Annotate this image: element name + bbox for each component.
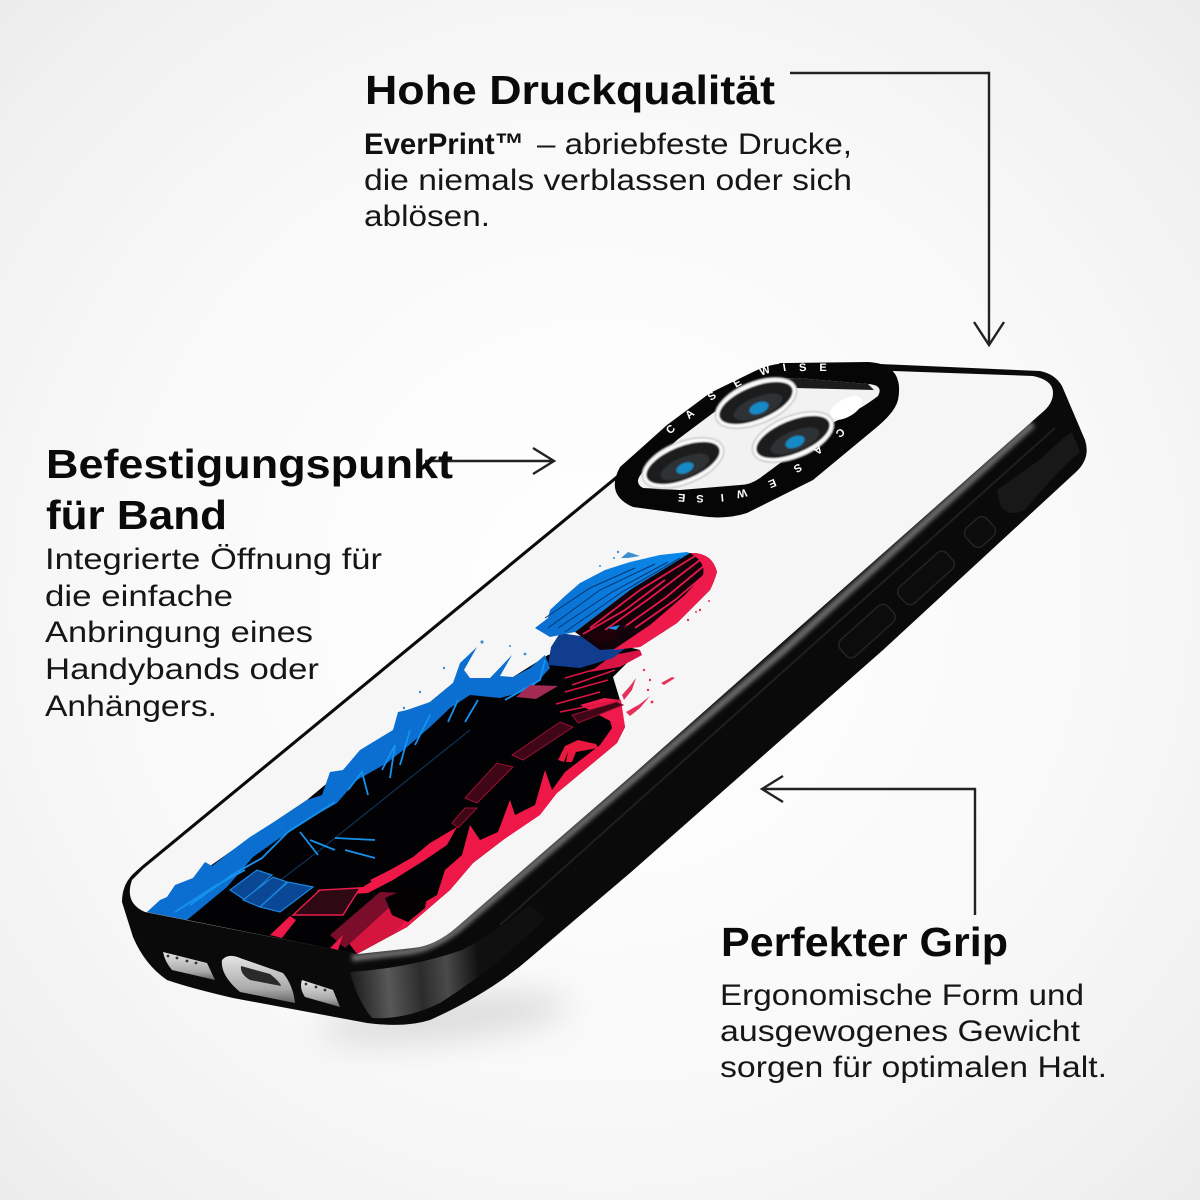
text block: print quality: EverPrint™ — [364, 128, 524, 161]
brand lettering lower: W — [735, 486, 748, 500]
collar — [590, 650, 642, 672]
figure blue feather strokes — [175, 660, 545, 912]
camera frame — [615, 362, 899, 517]
heading: strap attachment — [46, 441, 453, 538]
figure red lower mass — [345, 900, 420, 954]
brand lettering upper: S — [706, 390, 719, 404]
right speaker grille — [301, 980, 340, 1007]
hair dark core — [575, 553, 717, 650]
red streaks — [270, 855, 420, 950]
text block: print quality — [364, 128, 852, 233]
text block: strap attachment: Anhängers. — [45, 690, 217, 723]
blue eye glint — [607, 625, 620, 630]
face — [548, 633, 627, 668]
brand lettering lower: A — [811, 442, 824, 457]
hair blue mass — [535, 552, 695, 637]
brand lettering lower — [678, 425, 847, 504]
text block: strap attachment — [45, 543, 382, 723]
usb-c port — [222, 956, 295, 1003]
side rib line — [500, 428, 1055, 925]
flash highlight — [826, 391, 866, 425]
usb-c opening — [241, 966, 281, 986]
text block: strap attachment: Handybands oder — [45, 653, 319, 686]
text block: print quality: die niemals verblassen oder sich — [364, 164, 852, 197]
brand lettering lower: C — [833, 425, 847, 440]
brand lettering upper: W — [758, 364, 772, 379]
heading: strap attachment: für Band — [46, 492, 227, 538]
camera glass opening — [638, 378, 880, 490]
case body — [122, 363, 1087, 1025]
heading: strap attachment: Befestigungspunkt — [46, 441, 453, 487]
arrow: grip — [762, 776, 975, 915]
lens rear top — [708, 367, 804, 439]
brand lettering lower: S — [791, 461, 804, 475]
text block: grip — [720, 979, 1107, 1084]
brand lettering lower: E — [766, 476, 778, 490]
hair red strands — [583, 556, 712, 638]
lens right — [745, 401, 841, 473]
collar plate — [516, 685, 558, 699]
arrow: strap attachment — [425, 448, 554, 474]
belt blue plates — [230, 870, 313, 912]
brand lettering upper: A — [683, 408, 697, 422]
side button: action — [962, 514, 998, 550]
heading: print quality: Hohe Druckqualität — [365, 67, 775, 113]
text block: strap attachment: Integrierte Öffnung für — [45, 543, 382, 576]
brand lettering upper: E — [731, 376, 744, 390]
red paint splatter — [622, 600, 710, 716]
side button: volume down — [836, 601, 898, 661]
printed figure — [147, 551, 717, 954]
camera control button — [997, 432, 1080, 513]
brand lettering lower: S — [696, 492, 704, 504]
lens left — [635, 427, 731, 499]
text block: print quality: ablösen. — [364, 200, 490, 233]
text block: strap attachment: Anbringung eines — [45, 616, 313, 649]
drop shadow of phone case — [318, 983, 572, 1053]
text block: grip: sorgen für optimalen Halt. — [720, 1051, 1107, 1084]
belt red buckle — [293, 888, 360, 915]
hair red outline — [613, 553, 717, 650]
jacket collar red lines — [556, 668, 620, 712]
brand lettering lower: E — [678, 491, 686, 503]
dark red lower panel — [330, 892, 405, 948]
blue paint splatter — [403, 551, 640, 709]
back panel — [130, 371, 1053, 954]
figure red right band — [395, 698, 625, 932]
brand lettering upper: I — [782, 362, 787, 374]
figure black silhouette — [147, 640, 640, 954]
sleeve panels — [452, 702, 623, 828]
inner rim sheen — [352, 424, 1033, 958]
brand lettering upper — [664, 362, 827, 437]
charging ports — [163, 952, 340, 1007]
figure blue band — [147, 647, 550, 920]
red belt line — [317, 827, 457, 896]
brand lettering upper: C — [664, 423, 678, 437]
left speaker grille — [163, 952, 215, 980]
text block: strap attachment: die einfache — [45, 580, 233, 613]
lower corner sheen — [350, 905, 545, 1018]
text block: print quality: – abriebfeste Drucke, — [537, 128, 852, 161]
eye — [587, 625, 627, 643]
dark shape inside lower red — [385, 888, 428, 922]
camera top inner lip — [750, 378, 874, 392]
text block: grip: Ergonomische Form und — [720, 979, 1084, 1012]
sleeve logo — [558, 740, 598, 762]
hair blue strand gaps — [545, 558, 680, 632]
figure red upper shoulder — [580, 698, 625, 727]
brand lettering upper: S — [799, 362, 807, 374]
camera island — [615, 362, 899, 517]
brand lettering lower: I — [720, 491, 724, 503]
heading: grip: Perfekter Grip — [721, 919, 1008, 965]
brand lettering upper: E — [819, 362, 827, 374]
arrow: print quality — [790, 73, 1004, 345]
phone case — [122, 363, 1087, 1025]
side button: volume up — [895, 548, 957, 608]
text block: grip: ausgewogenes Gewicht — [720, 1015, 1081, 1048]
speaker holes — [167, 955, 326, 991]
